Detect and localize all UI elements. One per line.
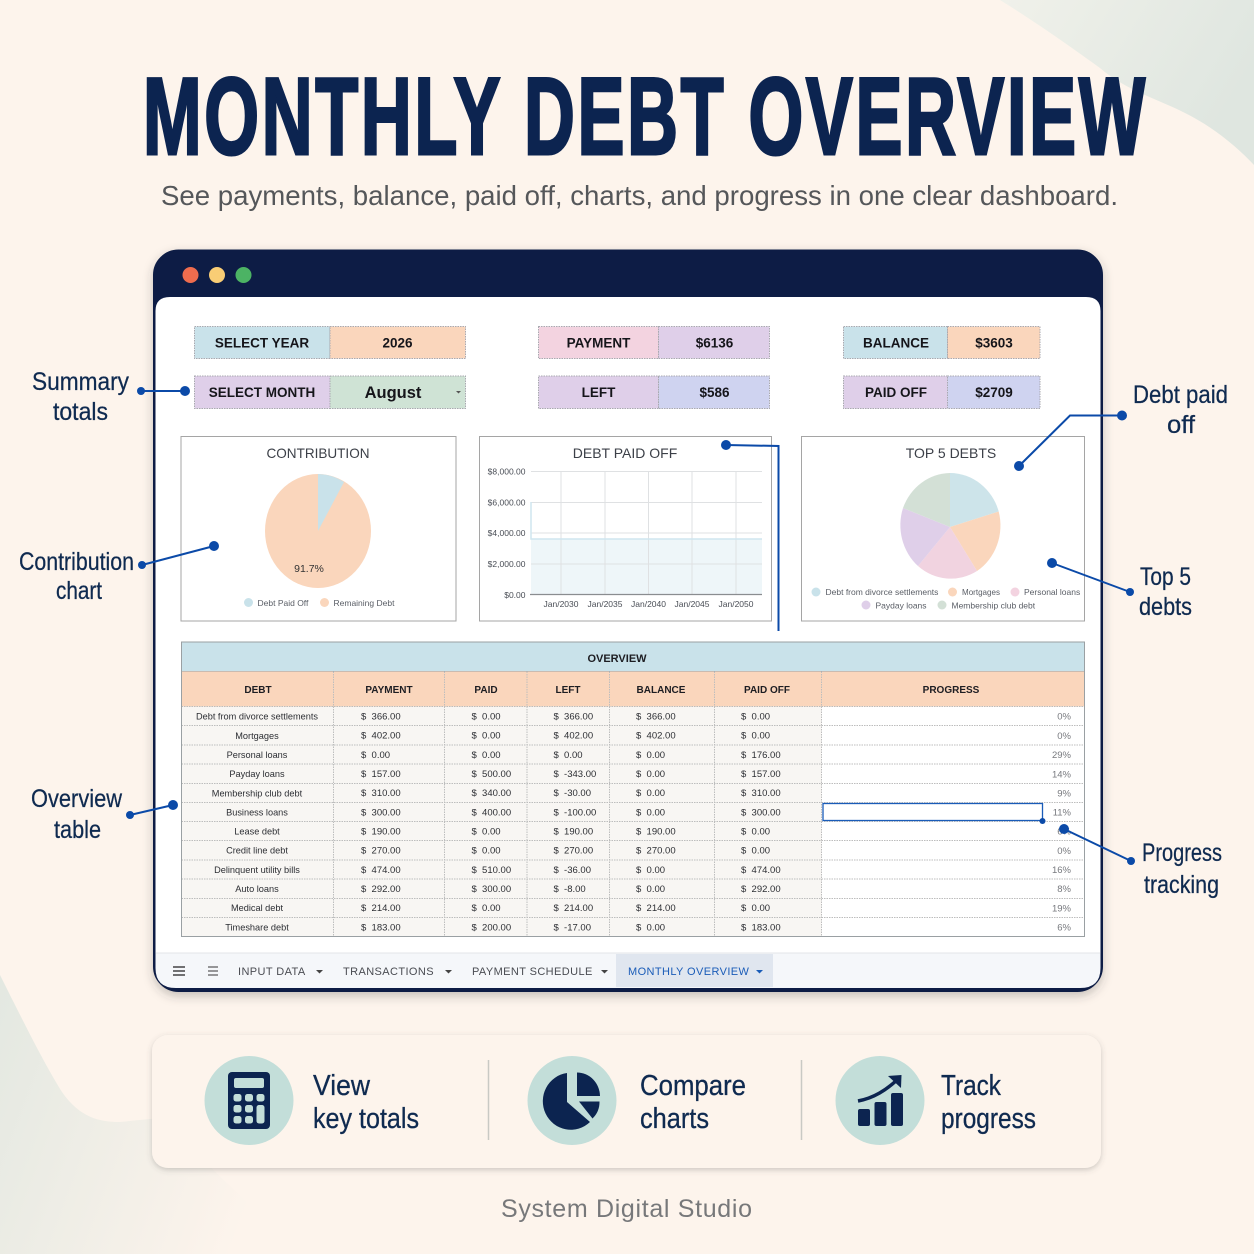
left column: $ 190.00 (554, 826, 593, 838)
icon: calculator (204, 1056, 294, 1145)
debt names: Auto loans (235, 884, 279, 894)
top 5 debts chart: TOP 5 DEBTS (906, 445, 996, 461)
left column: $ 270.00 (554, 846, 593, 856)
summary totals (194, 326, 1040, 408)
debt paid off chart: Jan/2045 (675, 599, 710, 609)
top 5 debts chart: Payday loans (876, 600, 927, 610)
debt names: Business loans (226, 808, 288, 818)
left column: $ 0.00 (554, 750, 583, 761)
icon: growth bars (836, 1056, 924, 1145)
paid off column: $ 183.00 (741, 922, 781, 934)
left column: $ -8.00 (554, 884, 586, 895)
balance column: $ 0.00 (636, 769, 665, 780)
paid column: $ 500.00 (472, 769, 511, 780)
feature text: track progress: progress (941, 1103, 1036, 1135)
progress column: 11% (1053, 808, 1072, 818)
paid off column: $ 310.00 (741, 788, 781, 799)
progress column: 0% (1057, 846, 1072, 857)
contribution chart (181, 436, 456, 621)
payment column: $ 157.00 (361, 769, 401, 780)
top 5 debts chart: Membership club debt (952, 600, 1036, 610)
paid off column: $ 300.00 (741, 808, 781, 818)
feature text: compare charts: charts (640, 1103, 709, 1135)
progress column: 0% (1057, 731, 1072, 742)
sheet tabs: MONTHLY OVERVIEW (628, 966, 750, 978)
paid off column: $ 0.00 (741, 846, 770, 856)
payment column: $ 402.00 (361, 730, 401, 742)
summary labels and values: LEFT (582, 385, 616, 400)
sheet tabs: TRANSACTIONS (343, 966, 434, 978)
paid column: $ 0.00 (472, 826, 501, 838)
window controls (182, 267, 252, 283)
left column: $ 402.00 (554, 730, 593, 742)
debt paid off chart: DEBT PAID OFF (573, 445, 677, 461)
feature bar (152, 1035, 1101, 1168)
progress column: 0% (1057, 712, 1072, 722)
paid off column: $ 176.00 (741, 750, 781, 761)
overview table (182, 642, 1084, 936)
debt names: Mortgages (235, 731, 279, 741)
feature text: key totals (313, 1070, 419, 1135)
left column: $ -30.00 (554, 788, 591, 799)
paid column: $ 200.00 (472, 922, 511, 934)
callout: contribution chart: Contribution (19, 548, 134, 576)
debt names: Lease debt (234, 826, 280, 836)
contribution chart: Remaining Debt (334, 598, 395, 608)
paid off column: $ 157.00 (741, 769, 781, 780)
table header: PAID OFF (744, 685, 790, 696)
callout: contribution chart (19, 541, 219, 605)
paid column (472, 712, 511, 934)
debt paid off chart: $2,000.00 (488, 559, 526, 569)
top 5 debts chart: Personal loans (1024, 587, 1080, 597)
debt paid off chart: Jan/2050 (719, 599, 754, 609)
debt paid off chart: Jan/2030 (544, 599, 579, 609)
table header: DEBT (244, 685, 272, 696)
table header: PAID (474, 685, 498, 696)
payment column: $ 190.00 (361, 826, 401, 838)
summary labels and values: $586 (699, 385, 730, 400)
debt names: Timeshare debt (225, 922, 289, 932)
progress column (1052, 712, 1072, 934)
balance column: $ 402.00 (636, 730, 676, 742)
sheet tabs: PAYMENT SCHEDULE (472, 966, 593, 978)
paid column: $ 510.00 (472, 865, 511, 876)
callout: overview table: Overview (31, 785, 123, 813)
paid off column: $ 0.00 (741, 903, 770, 914)
paid column: $ 340.00 (472, 788, 511, 799)
left column: $ 366.00 (554, 712, 593, 722)
top 5 debts chart (802, 436, 1084, 621)
icon: pie chart (528, 1056, 616, 1145)
summary labels and values: PAYMENT (567, 336, 631, 350)
left column: $ 214.00 (554, 903, 593, 914)
sheet tabs: INPUT DATA (238, 966, 306, 978)
progress column: 9% (1057, 788, 1072, 800)
balance column: $ 214.00 (636, 903, 676, 914)
progress column: 14% (1052, 770, 1072, 780)
payment column: $ 310.00 (361, 788, 401, 799)
footer brand: System Digital Studio (501, 1195, 752, 1223)
balance column: $ 0.00 (636, 750, 665, 761)
table header: PAYMENT (365, 685, 413, 696)
balance column: $ 0.00 (636, 865, 665, 876)
callout: progress tracking (1059, 824, 1222, 899)
callout: overview table (31, 785, 178, 844)
callout: summary totals (32, 368, 190, 426)
paid column: $ 0.00 (472, 712, 501, 722)
overview table: OVERVIEW (587, 653, 647, 665)
summary labels and values: PAID OFF (865, 385, 927, 400)
feature text: track progress: Track (941, 1070, 1001, 1102)
table header: BALANCE (637, 685, 686, 696)
payment column: $ 366.00 (361, 712, 401, 722)
progress column: 6% (1057, 922, 1072, 934)
paid off column: $ 0.00 (741, 712, 770, 722)
feature text: key totals: key totals (313, 1103, 419, 1135)
title: MONTHLY DEBT OVERVIEW (143, 54, 1146, 178)
payment column: $ 474.00 (361, 865, 401, 876)
debt names: Medical debt (231, 903, 283, 913)
summary labels and values (209, 336, 1013, 402)
payment column: $ 292.00 (361, 884, 401, 895)
callout: progress tracking: tracking (1144, 871, 1219, 899)
feature text: compare charts: Compare (640, 1070, 746, 1102)
callout: top 5 debts (1047, 558, 1192, 621)
balance column (636, 712, 676, 934)
callout: summary totals: totals (53, 398, 108, 426)
summary labels and values: SELECT MONTH (209, 385, 315, 400)
paid column: $ 0.00 (472, 903, 501, 914)
paid off column: $ 292.00 (741, 884, 781, 895)
debt names (196, 712, 318, 932)
paid off column: $ 0.00 (741, 730, 770, 742)
payment column (361, 712, 401, 934)
balance column: $ 270.00 (636, 846, 676, 856)
feature text: key totals: View (313, 1070, 371, 1102)
progress column: 6% (1057, 826, 1072, 838)
feature text: compare charts (640, 1070, 746, 1135)
left column: $ -100.00 (554, 808, 596, 818)
balance column: $ 0.00 (636, 922, 665, 934)
feature text: track progress (941, 1070, 1036, 1135)
table header (244, 685, 980, 696)
summary labels and values: BALANCE (863, 336, 929, 350)
table header: PROGRESS (923, 685, 980, 696)
summary labels and values: 2026 (382, 336, 413, 350)
subtitle: See payments, balance, paid off, charts, and progress in one clear dashboard. (161, 180, 1118, 211)
paid column: $ 400.00 (472, 808, 511, 818)
debt names: Personal loans (227, 750, 288, 760)
callout: debt paid off: off (1167, 411, 1195, 439)
top 5 debts chart: Mortgages (962, 587, 1000, 597)
balance column: $ 0.00 (636, 884, 665, 895)
debt paid off chart: $6,000.00 (488, 498, 526, 508)
left column (554, 712, 596, 934)
progress column: 16% (1052, 865, 1072, 876)
balance column: $ 0.00 (636, 808, 665, 818)
callout: debt paid off: Debt paid (1133, 381, 1228, 409)
paid off column: $ 0.00 (741, 826, 770, 838)
balance column: $ 366.00 (636, 712, 676, 722)
summary labels and values: $2709 (975, 385, 1013, 400)
summary labels and values: $3603 (975, 336, 1013, 350)
progress column: 8% (1057, 884, 1072, 895)
payment column: $ 214.00 (361, 903, 401, 914)
payment column: $ 270.00 (361, 846, 401, 856)
left column: $ -17.00 (554, 922, 591, 934)
debt paid off chart: Jan/2035 (588, 599, 623, 609)
payment column: $ 300.00 (361, 808, 401, 818)
callout: debt chart line (721, 440, 778, 631)
left column: $ -36.00 (554, 865, 591, 876)
debt paid off chart (480, 436, 772, 621)
table header: LEFT (556, 685, 580, 696)
paid off column: $ 474.00 (741, 865, 781, 876)
summary labels and values: SELECT YEAR (215, 336, 309, 350)
callout: progress tracking: Progress (1142, 839, 1222, 867)
selected cell (823, 804, 1046, 824)
callout: top 5 debts: debts (1139, 593, 1192, 621)
contribution chart: 91.7% (294, 563, 324, 575)
callout: contribution chart: chart (56, 577, 102, 605)
callout: summary totals: Summary (32, 368, 129, 396)
debt names: Payday loans (229, 769, 285, 779)
paid column: $ 0.00 (472, 846, 501, 856)
contribution chart: CONTRIBUTION (266, 445, 370, 461)
debt paid off chart: $8,000.00 (488, 466, 526, 476)
debt paid off chart: $0.00 (504, 590, 526, 600)
paid column: $ 300.00 (472, 884, 511, 895)
dashboard window (154, 251, 1102, 990)
callout: overview table: table (54, 816, 101, 844)
top 5 debts chart: Debt from divorce settlements (826, 587, 938, 597)
progress column: 19% (1052, 904, 1072, 914)
paid off column (741, 712, 781, 934)
debt names: Credit line debt (226, 846, 288, 856)
paid column: $ 0.00 (472, 750, 501, 761)
callout: top 5 debts: Top 5 (1140, 563, 1191, 591)
debt names: Debt from divorce settlements (196, 712, 318, 722)
balance column: $ 190.00 (636, 826, 676, 838)
debt names: Membership club debt (212, 788, 303, 798)
callout: debt paid off (1014, 381, 1228, 471)
debt paid off chart: $4,000.00 (488, 528, 526, 538)
debt names: Delinquent utility bills (214, 865, 300, 875)
contribution chart: Debt Paid Off (258, 598, 309, 608)
progress column: 29% (1052, 750, 1072, 761)
sheet tabs (173, 954, 773, 987)
left column: $ -343.00 (554, 769, 596, 780)
debt paid off chart: Jan/2040 (631, 599, 666, 609)
summary labels and values: August (365, 384, 422, 402)
paid column: $ 0.00 (472, 730, 501, 742)
payment column: $ 0.00 (361, 750, 390, 761)
balance column: $ 0.00 (636, 788, 665, 799)
summary labels and values: $6136 (696, 336, 734, 350)
payment column: $ 183.00 (361, 922, 401, 934)
